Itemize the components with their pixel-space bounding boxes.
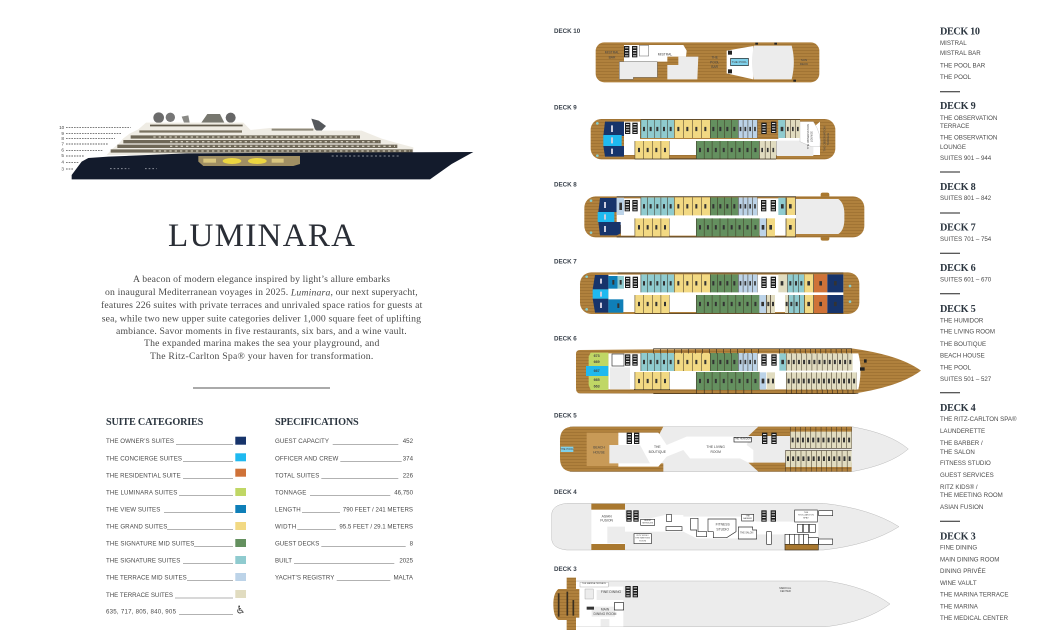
legend rows: THE GRAND SUITES xyxy=(106,524,167,530)
deck index: deck 10: DECK 10 xyxy=(940,26,980,38)
deck index: deck 4 xyxy=(940,403,1017,511)
deck index: deck 3: DINING PRIVÉE xyxy=(940,568,986,575)
specification rows: OFFICER AND CREW xyxy=(275,456,339,462)
deck index: deck 9: SUITES 901 – 944 xyxy=(940,155,992,162)
deck plan: deck 3 xyxy=(553,578,890,630)
intro paragraph: The expanded marina makes the sea your playground, and xyxy=(144,338,379,349)
deck plan: deck 3: CENTER xyxy=(780,589,791,593)
deck index: deck 6: SUITES 601 – 670 xyxy=(940,276,992,284)
specification rows: TONNAGE xyxy=(275,490,306,496)
panel: suite categories legend xyxy=(106,417,246,616)
deck index: deck 4: FITNESS STUDIO xyxy=(940,460,991,467)
deck index: deck 10: MISTRAL xyxy=(940,40,967,47)
deck labels: DECK 4 xyxy=(554,489,577,496)
deck plan: deck 4: RITZ KIDS® xyxy=(637,534,649,537)
deck plan: deck 10 xyxy=(596,42,819,82)
icon: domes and funnels xyxy=(153,112,326,131)
deck labels: DECK 10 xyxy=(554,28,581,35)
deck plan: deck 4: ROOM xyxy=(639,540,646,542)
deck index: deck 7 xyxy=(940,222,992,243)
deck plan: deck 10: THE POOL xyxy=(732,60,747,64)
deck index: deck 6 xyxy=(940,263,992,284)
deck plan: deck 5: BEACH xyxy=(593,445,605,449)
deck index: deck 9 xyxy=(940,101,997,162)
deck index: deck 4: THE RITZ-CARLTON SPA® xyxy=(940,416,1017,423)
deck index: deck 8: SUITES 801 – 842 xyxy=(940,195,992,202)
specification rows: TOTAL SUITES xyxy=(275,472,319,480)
intro paragraph: ambiance. Savor moments in five restaurants, six bars, and a wine vault. xyxy=(116,326,407,337)
deck plan: deck 6: 673 xyxy=(594,354,600,358)
deck index: deck 4: GUEST SERVICES xyxy=(940,472,994,479)
deck plan: deck 9 xyxy=(591,119,835,159)
legend rows: THE OWNER’S SUITES xyxy=(106,438,174,445)
intro paragraph: features 226 suites with private terraces and unrivaled space ratios for guests at xyxy=(101,300,423,311)
deck plan: deck 10: BAR xyxy=(711,65,719,69)
deck index: deck 3: THE MARINA xyxy=(940,604,979,610)
deck plan: deck 3: DINING ROOM xyxy=(594,612,617,616)
deck plan: deck 10: MISTRAL xyxy=(605,50,619,54)
deck number callouts: 4 xyxy=(61,159,64,164)
deck index: deck 10: MISTRAL BAR xyxy=(940,50,981,57)
intro paragraph: The Ritz-Carlton Spa® your haven for transformation. xyxy=(150,351,373,362)
deck number callouts: 7 xyxy=(61,141,64,146)
deck index: deck 9: LOUNGE xyxy=(940,144,966,151)
deck plan: deck 4: GUEST xyxy=(644,520,652,522)
deck number callouts: 3 xyxy=(61,166,64,171)
deck labels: DECK 7 xyxy=(554,258,577,266)
deck index: deck 4: THE SALON xyxy=(940,449,975,456)
legend rows: THE CONCIERGE SUITES xyxy=(106,456,182,462)
deck plan: deck 6 xyxy=(576,348,921,394)
specification rows: 46,750 xyxy=(394,490,414,496)
deck plan: deck 6: 667 xyxy=(594,369,600,373)
deck plan: deck 10: THE xyxy=(711,55,719,59)
hull xyxy=(72,152,473,179)
deck index: deck 7: SUITES 701 – 754 xyxy=(940,236,992,243)
deck plan: deck 10: MISTRAL xyxy=(658,53,672,57)
legend rows: THE SIGNATURE SUITES xyxy=(106,558,180,564)
specification rows: 8 xyxy=(410,540,414,548)
intro paragraph xyxy=(101,274,423,362)
deck plan: deck 9: THE OBSERVATION xyxy=(806,124,810,149)
deck plan: deck 9: LOUNGE xyxy=(809,131,813,142)
deck index: deck 8: DECK 8 xyxy=(940,182,976,193)
deck plan: deck 4: THE MEETING xyxy=(635,538,650,540)
specification rows: 2025 xyxy=(399,558,414,564)
deck labels xyxy=(554,28,581,573)
deck index: deck 9: THE OBSERVATION xyxy=(940,134,997,142)
deck number callouts: 10 xyxy=(59,125,65,130)
deck plan: deck 4: FUSION xyxy=(600,519,614,523)
deck plan: deck 5: THE HUMIDOR xyxy=(734,439,751,441)
specification rows: GUEST DECKS xyxy=(275,540,319,548)
deck plan: deck 3: MAIN xyxy=(601,608,610,612)
deck labels: DECK 6 xyxy=(554,336,577,342)
deck plan: deck 4: SERVICES xyxy=(642,523,654,525)
deck plan: deck 10: POOL xyxy=(710,60,719,64)
deck index: deck 4: DECK 4 xyxy=(940,403,976,414)
deck plan: deck 4: BARBER xyxy=(743,517,753,520)
deck index: deck 7: DECK 7 xyxy=(940,222,976,234)
deck index: deck 4: THE BARBER / xyxy=(940,440,983,447)
deck plan: deck 4: THE xyxy=(804,512,809,514)
deck index: deck 10: THE POOL xyxy=(940,74,972,81)
legend rows: 635, 717, 805, 840, 905 xyxy=(106,608,177,616)
deck plan: deck 9: TERRACE xyxy=(826,132,830,145)
specification rows: 452 xyxy=(403,438,414,445)
deck plan: deck 5: HOUSE xyxy=(593,450,606,454)
specification rows: 790 FEET / 241 METERS xyxy=(343,506,413,514)
ship profile illustration xyxy=(59,112,473,179)
legend rows: THE TERRACE MID SUITES xyxy=(106,574,187,582)
deck plan: deck 5: THE LIVING xyxy=(706,445,725,449)
deck index: deck 5: THE BOUTIQUE xyxy=(940,341,986,348)
deck index: deck 3 xyxy=(940,532,1009,622)
intro paragraph: A beacon of modern elegance inspired by light’s allure embarks xyxy=(133,274,390,285)
legend rows xyxy=(106,437,246,616)
deck index: deck 3: FINE DINING xyxy=(940,544,977,552)
title: LUMINARA xyxy=(168,218,355,254)
deck plan: deck 3: FINE DINING xyxy=(601,590,621,594)
deck index: deck 3: MAIN DINING ROOM xyxy=(940,556,999,564)
legend rows: THE RESIDENTIAL SUITE xyxy=(106,472,181,480)
deck plan: deck 10: DECK xyxy=(800,62,808,66)
specification rows: YACHT’S REGISTRY xyxy=(275,574,334,582)
specification rows: GUEST CAPACITY xyxy=(275,438,329,445)
deck plan: deck 3: THE MARINA TERRACE xyxy=(582,582,607,585)
specification rows xyxy=(275,438,414,582)
deck index: deck 6: DECK 6 xyxy=(940,263,976,274)
deck labels: DECK 9 xyxy=(554,104,577,112)
legend rows: THE TERRACE SUITES xyxy=(106,592,173,599)
deck labels: DECK 8 xyxy=(554,182,577,188)
deck plan: deck 4: THE SALON xyxy=(740,531,754,534)
specification rows: 374 xyxy=(403,456,414,462)
deck labels: DECK 3 xyxy=(554,566,577,573)
deck plan: deck 5: ROOM xyxy=(710,450,721,454)
deck plan: deck 5: BOUTIQUE xyxy=(649,450,667,454)
deck index: deck 5: THE HUMIDOR xyxy=(940,318,984,324)
deck plan: deck 8 xyxy=(584,193,864,241)
specification rows: 226 xyxy=(403,472,414,480)
heading: specifications: SPECIFICATIONS xyxy=(275,417,359,428)
deck index: deck 4: RITZ KIDS® / xyxy=(940,484,978,491)
deck index: deck 5: SUITES 501 – 527 xyxy=(940,376,992,383)
deck plan: deck 7 xyxy=(580,272,859,314)
heading: suite categories: SUITE CATEGORIES xyxy=(106,417,204,428)
deck plan: deck 3: MEDICAL xyxy=(779,586,792,590)
deck number callouts: 6 xyxy=(61,147,64,152)
deck index: deck 9: DECK 9 xyxy=(940,101,976,112)
superstructure tiers xyxy=(107,123,413,155)
deck plan: deck 4: THE xyxy=(746,516,750,518)
deck plan: deck 4 xyxy=(552,503,899,550)
deck index: deck 9: TERRACE xyxy=(940,123,969,130)
deck plan: deck 4: RITZ-CARLTON xyxy=(798,514,814,517)
deck plan: deck 10: SUN xyxy=(801,58,807,62)
specification rows: 95.5 FEET / 29.1 METERS xyxy=(339,524,413,530)
deck plan: deck 5: THE xyxy=(654,445,661,449)
specification rows: BUILT xyxy=(275,558,292,564)
deck plan: deck 10: BAR xyxy=(609,55,616,59)
deck index: deck 3: THE MARINA TERRACE xyxy=(940,592,1008,598)
deck number callouts xyxy=(59,125,131,171)
deck index: deck 5 xyxy=(940,304,995,383)
deck index: deck 5: THE POOL xyxy=(940,364,972,372)
deck plan: deck 6: 669 xyxy=(594,360,600,364)
legend rows: THE LUMINARA SUITES xyxy=(106,490,177,496)
deck index: deck 4: THE MEETING ROOM xyxy=(940,492,1003,499)
deck index: deck 3: DECK 3 xyxy=(940,532,976,542)
deck plan: deck 9: THE OBSERVATION xyxy=(822,127,826,151)
icon: wheelchair: ♿ xyxy=(236,604,245,616)
deck index: deck 10: THE POOL BAR xyxy=(940,62,986,70)
panel: specifications xyxy=(275,417,414,582)
intro paragraph: sea, while two new upper suite categories deliver 1,000 square feet of uplifting xyxy=(102,314,421,324)
deck index: deck 9: THE OBSERVATION xyxy=(940,115,997,122)
intro paragraph: on inaugural Mediterranean voyages in 2025. Luminara, our next superyacht, xyxy=(105,287,418,298)
specification rows: MALTA xyxy=(393,574,414,582)
deck plan: deck 6: 665 xyxy=(594,378,600,382)
deck index: deck 3: THE MEDICAL CENTER xyxy=(940,615,1009,622)
deck number callouts: 5 xyxy=(61,153,64,158)
marina windows xyxy=(110,156,400,169)
legend rows: THE VIEW SUITES xyxy=(106,506,160,514)
deck plan: deck 6: 663 xyxy=(594,384,600,388)
legend rows: THE SIGNATURE MID SUITES xyxy=(106,540,194,548)
deck index: deck 5: DECK 5 xyxy=(940,304,976,315)
deck plan: deck 4: STUDIO xyxy=(716,527,729,531)
deck index: deck 8 xyxy=(940,182,992,202)
deck plan: deck 5: THE POOL xyxy=(560,447,574,451)
deck plan: deck 4: SPA® xyxy=(803,517,809,520)
specification rows: LENGTH xyxy=(275,506,301,514)
deck number callouts: 8 xyxy=(61,136,64,141)
deck index: deck 5: BEACH HOUSE xyxy=(940,352,985,360)
deck plan: deck 4: FITNESS xyxy=(716,523,730,527)
deck plan: deck 4: ASIAN xyxy=(602,514,612,518)
deck labels: DECK 5 xyxy=(554,412,577,420)
deck plan: deck 5 xyxy=(560,427,908,472)
deck number callouts: 9 xyxy=(61,131,64,136)
specification rows: WIDTH xyxy=(275,524,296,530)
deck index: deck 3: WINE VAULT xyxy=(940,580,977,587)
deck index: deck 4: ASIAN FUSION xyxy=(940,504,983,511)
deck index: deck 4: LAUNDERETTE xyxy=(940,428,985,435)
deck index: deck 5: THE LIVING ROOM xyxy=(940,328,995,336)
deck index: deck 10 xyxy=(940,26,986,81)
